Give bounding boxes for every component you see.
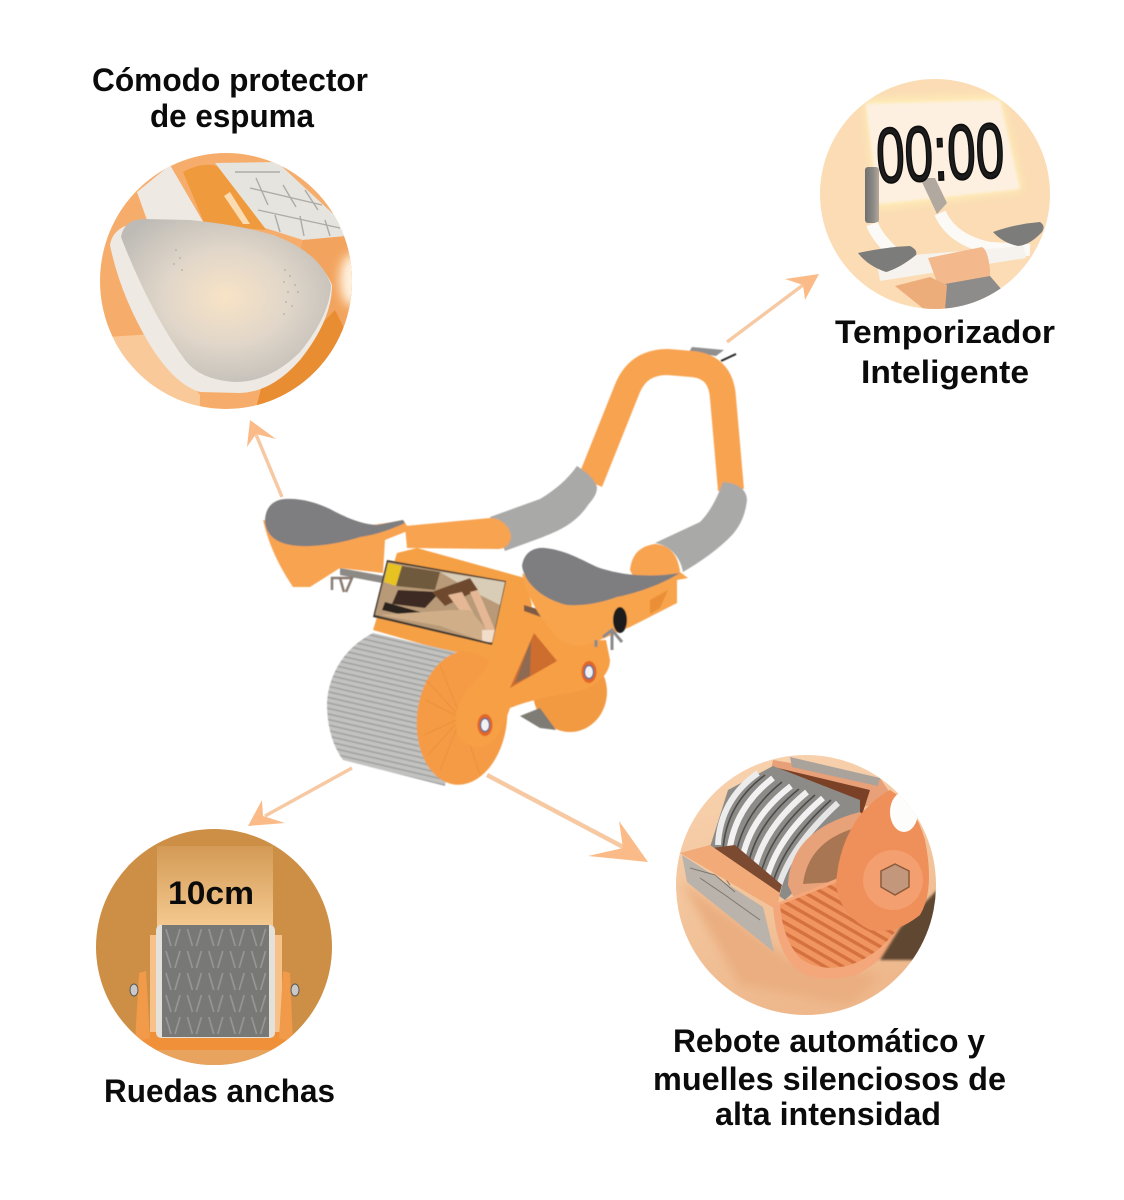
panel: timer circle photo — [815, 75, 1055, 315]
heading: smart timer — [835, 314, 1055, 390]
orange body block — [928, 247, 990, 284]
projected screen glow — [865, 96, 1022, 208]
central body — [373, 548, 532, 665]
heading: automatic rebound and springs: alta intensidad — [715, 1096, 941, 1132]
spring coils — [718, 773, 838, 893]
backlit panel — [157, 846, 273, 931]
right bracket cut — [650, 590, 668, 614]
projected screen — [866, 100, 1020, 204]
heading: automatic rebound and springs: muelles silenciosos de — [653, 1061, 1006, 1097]
heading: smart timer: Inteligente — [861, 354, 1029, 390]
pad white rim — [110, 220, 332, 393]
grey front roller with ridges — [327, 633, 465, 786]
white arms — [872, 213, 1030, 258]
panel: spring mechanism circle photo — [670, 750, 945, 1020]
left grey grip — [865, 167, 879, 223]
right grey pad — [993, 222, 1044, 246]
heading: smart timer: Temporizador — [835, 314, 1055, 350]
orange handle tube — [590, 362, 731, 490]
left pad support — [263, 520, 410, 587]
grey wheel tread — [215, 162, 356, 240]
grey outer tread — [682, 855, 774, 952]
left grey pad — [858, 246, 916, 272]
lower right dark orange — [256, 310, 344, 406]
back wheel — [533, 652, 607, 732]
arrow: to wide wheels — [248, 768, 352, 826]
top lid — [772, 760, 888, 806]
right pad support — [522, 572, 688, 646]
heading: wide wheels: Ruedas anchas — [104, 1073, 335, 1109]
left bracket — [135, 971, 150, 1042]
inner drum — [788, 812, 880, 900]
timer digits: 00:00 — [874, 106, 1006, 200]
orange wheel side — [183, 165, 266, 230]
perforation dots — [173, 249, 299, 315]
grey patterned roller — [162, 925, 269, 1037]
heading: foam protector: de espuma — [150, 98, 314, 134]
triangle cutout — [510, 633, 557, 688]
roller side highlights — [156, 925, 275, 1038]
panel: wide wheels circle photo — [92, 825, 337, 1075]
heading: foam protector — [92, 62, 368, 134]
right side shade — [258, 236, 352, 405]
bolts — [130, 984, 138, 996]
white glow right — [340, 254, 364, 306]
orange tube to left pad — [405, 518, 511, 549]
plate inner disc — [863, 850, 923, 910]
white strap — [137, 166, 203, 222]
wheel highlight — [224, 192, 250, 224]
right wing nut — [596, 630, 622, 650]
arrow: to spring mechanism — [487, 775, 648, 862]
front wheel face — [410, 647, 514, 789]
timer box on handle — [689, 347, 724, 356]
cable — [721, 354, 736, 361]
wheel spokes — [424, 665, 480, 775]
black knob — [613, 607, 627, 633]
heading: automatic rebound and springs — [653, 1023, 1006, 1132]
panel: foam protector circle photo — [100, 153, 352, 409]
white crossbar — [876, 246, 1026, 281]
grey sleeve 2 — [655, 482, 747, 572]
right pad top — [522, 548, 680, 605]
striped half drum — [780, 882, 900, 968]
grey sleeve 1 — [490, 466, 597, 551]
hex bolt — [881, 864, 909, 895]
bottom orange base — [142, 1040, 286, 1065]
right bracket — [279, 971, 293, 1042]
peach frame — [150, 935, 282, 1035]
arm frame — [456, 583, 610, 747]
back wheel tread — [520, 708, 556, 730]
rear rod — [340, 568, 384, 583]
pad surface — [121, 219, 331, 382]
heading: automatic rebound and springs: Rebote automático y — [673, 1023, 985, 1059]
white highlight — [890, 792, 918, 832]
inside dark cavity — [710, 766, 860, 900]
arrow: to timer — [727, 274, 819, 342]
orange lower-left body — [895, 277, 947, 310]
side plate — [836, 790, 929, 931]
box orange rim — [680, 845, 780, 910]
product illustration: ab roller — [263, 347, 747, 789]
width label: 10cm — [168, 875, 254, 911]
arrow: to foam protector — [247, 420, 282, 497]
rear axle cap — [582, 661, 596, 683]
grey wheel — [945, 276, 1002, 310]
right grey grip — [920, 178, 947, 214]
lower shadow — [684, 884, 871, 1002]
elbow orange — [630, 544, 680, 590]
left wing nut — [332, 578, 352, 592]
left pad top — [265, 499, 405, 546]
dark shadow — [880, 890, 945, 960]
lower left light area — [112, 334, 200, 406]
brown latch — [524, 605, 544, 617]
heading: foam protector: Cómodo protector — [92, 62, 368, 98]
phone frame — [373, 560, 506, 645]
front axle cap — [478, 714, 492, 736]
phone photo — [370, 555, 510, 650]
drum rim — [773, 878, 908, 979]
dark base of coils — [714, 845, 782, 893]
